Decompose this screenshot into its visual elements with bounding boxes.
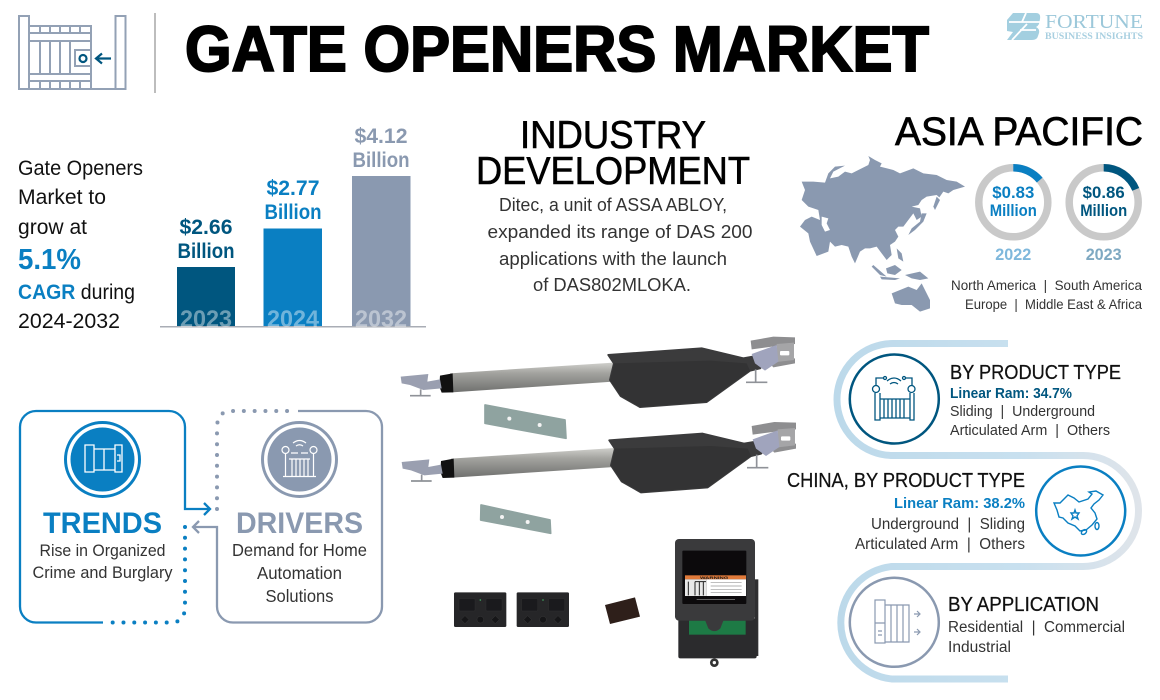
map: Asia Pacific (800, 156, 965, 312)
text block: market growth: 2024-2032 (18, 310, 120, 333)
donut: 2023 (1069, 168, 1138, 264)
icon: trends gate (66, 422, 140, 496)
bar chart: market size: $2.66 (180, 216, 232, 239)
heading: industry development (476, 114, 750, 193)
logo: Fortune Business Insights: FORTUNE (1045, 11, 1143, 33)
panel: by product type: Sliding | Underground (950, 403, 1095, 420)
panel: drivers (193, 411, 382, 622)
text block: other regions: North America | South America (951, 277, 1142, 293)
panel: by product type: Articulated Arm | Others (950, 422, 1110, 439)
bar chart: market size: 2024 (267, 306, 320, 333)
bar chart: market size: $2.77 (266, 177, 320, 200)
panel: trends: Crime and Burglary (32, 563, 173, 582)
bar chart: market size: Billion (264, 201, 322, 224)
bar chart: market size: $4.12 (354, 125, 408, 148)
donut: 2022: $0.83 (992, 184, 1034, 202)
bar chart: market size (160, 125, 426, 333)
panel: drivers: Automation (257, 563, 342, 583)
bar chart: market size: Billion (178, 240, 234, 263)
panel: china by product type: CHINA, BY PRODUCT TYPE (787, 470, 1025, 492)
panel: china by product type: Linear Ram: 38.2% (894, 496, 1025, 512)
panel: trends: TRENDS (43, 507, 162, 540)
product image: remotes and control box: WARNING (700, 575, 728, 580)
logo: Fortune Business Insights (1007, 11, 1143, 41)
heading: industry development: INDUSTRY (520, 114, 706, 157)
panel: drivers: Demand for Home (232, 540, 367, 560)
text block: industry development: expanded its range of DAS 200 (488, 222, 752, 242)
title: GATE OPENERS MARKET (185, 13, 929, 85)
panel: trends (20, 411, 210, 622)
text block: industry development: applications with the launch (499, 249, 727, 269)
icon: china map (1036, 466, 1125, 556)
panel: by product type (850, 354, 1121, 444)
bar chart: market size: Billion (352, 149, 410, 172)
logo: Fortune Business Insights: BUSINESS INSIGHTS (1045, 31, 1143, 41)
donut: 2022 (979, 168, 1048, 264)
icon: gate header (19, 16, 126, 89)
panel: by application: Residential | Commercial (948, 619, 1125, 636)
panel: china by product type (787, 466, 1125, 556)
panel: drivers: DRIVERS (236, 507, 363, 540)
text block: market growth: Market to (18, 186, 106, 209)
product image: remotes and control box (454, 539, 758, 667)
icon: smart gate (850, 354, 939, 444)
donut: 2022: 2022 (995, 246, 1031, 264)
heading: Asia Pacific: ASIA PACIFIC (895, 110, 1143, 154)
bar chart: market size: 2032 (355, 306, 407, 333)
donut: 2023: 2023 (1086, 246, 1122, 264)
heading: industry development: DEVELOPMENT (476, 150, 750, 193)
panel: china by product type: Articulated Arm | Others (855, 536, 1025, 553)
bar chart: market size: 2023 (180, 306, 232, 333)
text block: market growth (18, 157, 143, 333)
panel: by application: BY APPLICATION (948, 594, 1099, 616)
header divider (154, 13, 156, 93)
text block: other regions (951, 277, 1142, 312)
panel: by application (850, 578, 1125, 667)
text block: industry development: of DAS802MLOKA. (533, 275, 691, 295)
text block: industry development (488, 195, 752, 295)
icon: sliding gate (850, 578, 939, 667)
donut: 2022: Million (990, 202, 1037, 220)
panel: trends: Rise in Organized (40, 541, 166, 560)
icon: drivers gate (262, 422, 336, 496)
panel: by application: Industrial (948, 639, 1011, 656)
panel: by product type: Linear Ram: 34.7% (950, 386, 1072, 402)
text block: other regions: Europe | Middle East & Africa (965, 296, 1142, 312)
text block: market growth: CAGR during (18, 281, 135, 304)
donut: 2023: Million (1080, 202, 1127, 220)
text block: market growth: grow at (18, 216, 87, 239)
panel: by product type: BY PRODUCT TYPE (950, 362, 1121, 384)
panel: drivers: Solutions (266, 586, 334, 606)
text block: market growth: Gate Openers (18, 157, 143, 180)
text block: market growth: 5.1% (18, 244, 81, 276)
product image: linear actuators (401, 337, 796, 533)
panel: china by product type: Underground | Sliding (871, 516, 1025, 533)
connector pipe (837, 344, 1138, 679)
donut: 2023: $0.86 (1083, 184, 1125, 202)
text block: industry development: Ditec, a unit of ASSA ABLOY, (499, 195, 727, 215)
